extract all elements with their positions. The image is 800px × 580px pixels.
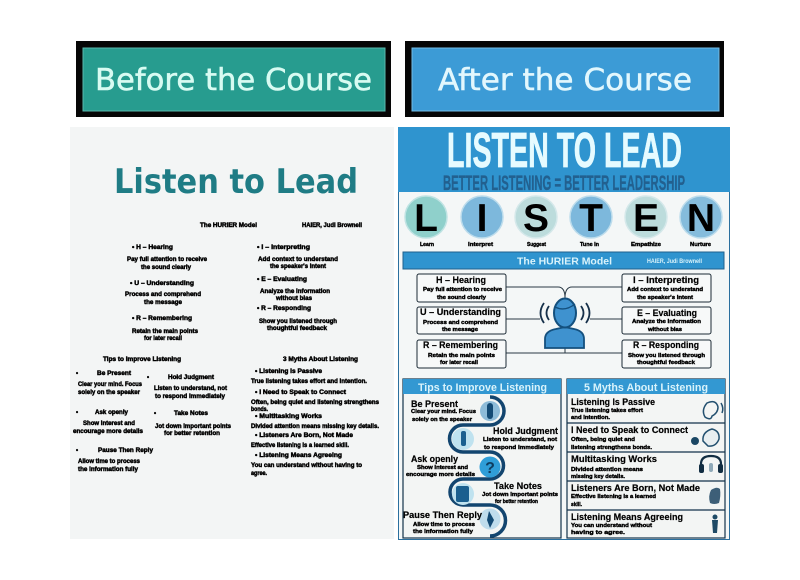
text block: plain document body: Show interest and: [83, 421, 135, 427]
text block: plain document body: Ask openly: [95, 410, 129, 416]
text block: plain document body: Clear your mind. Focus: [78, 382, 143, 388]
model box: Responding: [622, 340, 711, 368]
tip text: Take Notes: Jot down important points: [482, 492, 558, 498]
tip text: Be Present: Clear your mind. Focus: [411, 409, 476, 415]
text block: plain document body: Effective listening is a learned skill.: [251, 443, 349, 449]
text block: plain document body: for later recall: [144, 336, 182, 342]
header banner: [398, 124, 730, 195]
model box: Hearing: the sound clearly: [437, 295, 487, 301]
text block: plain document body: • Multitasking Works: [255, 414, 323, 420]
myth: Multitasking Works: missing key details.: [571, 474, 625, 480]
LISTEN letter circles: E: [633, 197, 659, 240]
text block: plain document body: • I Need to Speak to Connect: [255, 390, 346, 396]
myth: I Need to Speak to Connect: [571, 425, 688, 451]
myth: Listeners Are Born, Not Made: Effective listening is a learned: [571, 494, 656, 500]
LISTEN letter circles: I: [477, 197, 487, 240]
LISTEN letter circles: Learn: [420, 242, 435, 248]
myth: Multitasking Works: [571, 454, 657, 480]
icon: standing figure: [712, 514, 718, 533]
myth: Listening Is Passive: [571, 397, 655, 421]
icon: ear: [703, 402, 723, 419]
text block: plain document body: •: [154, 411, 156, 417]
text block: plain document body: Pay full attention to receive: [127, 257, 208, 263]
text block: plain document body: thoughtful feedback: [267, 326, 328, 332]
LISTEN letter circles: L: [414, 197, 438, 240]
tip text: Hold Judgment: Hold Judgment: [493, 426, 558, 436]
myth: I Need to Speak to Connect: Often, being quiet and: [571, 437, 635, 443]
section bar: The HURIER Model: HAIER, Judi Brownell: [647, 259, 702, 265]
myth: Listeners Are Born, Not Made: Listeners Are Born, Not Made: [571, 483, 700, 493]
panel: before course plain document: [70, 127, 394, 539]
section bar: The HURIER Model: The HURIER Model: [517, 256, 612, 268]
LISTEN letter circles: Tune In: [580, 242, 600, 248]
myth: Listening Is Passive: True listening takes effort: [571, 408, 643, 414]
text block: plain document body: Be Present: [97, 371, 131, 377]
tip text: Be Present: [411, 399, 476, 423]
text block: plain document body: •: [147, 375, 149, 381]
tip text: Take Notes: [482, 481, 558, 505]
model box: Responding: R – Responding: [633, 340, 699, 350]
tip text: Hold Judgment: Listen to understand, not: [483, 437, 557, 443]
myth: Multitasking Works: Divided attention means: [571, 467, 643, 473]
model box: Evaluating: E – Evaluating: [637, 308, 697, 318]
text block: plain document body: •: [76, 371, 78, 377]
tip text: Ask openly: [406, 454, 475, 478]
heading: Before the Course: [76, 41, 391, 117]
text block: plain document body: to respond immediately: [155, 394, 226, 400]
text block: plain document body: the information fully: [78, 467, 139, 473]
panel: Tips to Improve Listening: Tips to Improve Listening: [418, 382, 547, 394]
text block: plain document body: Retain the main points: [132, 329, 199, 335]
title: Listen to Lead: Listen to Lead: [114, 162, 358, 202]
text block: plain document body: agree.: [251, 471, 267, 477]
model box: Hearing: [417, 274, 506, 302]
tip icons: ?: [485, 460, 495, 477]
model box: Evaluating: Analyze the information: [632, 319, 702, 325]
text block: plain document body: • Listening Is Passive: [255, 369, 323, 375]
tip text: Be Present: Be Present: [411, 399, 458, 409]
text block: plain document body: Show you listened through: [259, 319, 337, 325]
text block: plain document body: Hold Judgment: [168, 375, 214, 381]
myth: Listening Is Passive: Listening Is Passive: [571, 397, 655, 407]
LISTEN letter circles: T: [579, 197, 603, 240]
tip text: Ask openly: Ask openly: [411, 454, 458, 464]
icon: headphones: [699, 456, 723, 473]
model box: Understanding: U – Understanding: [420, 307, 501, 317]
tip text: Pause Then Reply: Allow time to process: [413, 522, 475, 528]
model box: Responding: thoughtful feedback: [637, 360, 696, 366]
heading: After the Course: [405, 41, 724, 117]
model box: Understanding: [417, 307, 506, 334]
model box: Evaluating: without bias: [647, 327, 682, 333]
text block: plain document body: HAIER, Judi Brownell: [302, 223, 362, 229]
model box: Remembering: [417, 340, 506, 368]
serpentine path: [450, 397, 505, 536]
text block: plain document body: • I – Interpreting: [257, 245, 310, 251]
myth: Listeners Are Born, Not Made: [571, 483, 700, 508]
text block: plain document body: 3 Myths About Listening: [283, 357, 358, 363]
text block: plain document body: solely on the speaker: [78, 390, 141, 396]
text block: plain document body: bonds.: [251, 407, 268, 413]
text block: plain document body: • R – Remembering: [132, 316, 192, 322]
model box: Interpreting: the speaker's intent: [637, 295, 693, 301]
myth: Listening Is Passive: and intention.: [571, 415, 610, 421]
text block: plain document body: • R – Responding: [257, 306, 311, 312]
text block: plain document body: Often, being quiet and listening strengthens: [251, 400, 380, 406]
text block: plain document body: The HURIER Model: [200, 223, 257, 229]
tip text: Take Notes: for better retention: [495, 499, 539, 505]
myth: Listening Means Agreeing: Listening Means Agreeing: [571, 512, 683, 522]
model box: Hearing: Pay full attention to receive: [423, 287, 502, 293]
text block: plain document body: • E – Evaluating: [257, 277, 307, 283]
LISTEN letter circles: Empathize: [631, 242, 661, 248]
text block: plain document body: True listening takes effort and intention.: [251, 379, 367, 385]
model box: Hearing: H – Hearing: [436, 275, 486, 285]
myth: Listening Means Agreeing: having to agree.: [571, 530, 626, 536]
model box: Understanding: Process and comprehend: [423, 320, 498, 326]
text block: plain document body: Divided attention means missing key details.: [251, 424, 379, 430]
tip text: Be Present: solely on the speaker: [412, 417, 473, 423]
myth: I Need to Speak to Connect: listening strengthens bonds.: [571, 445, 653, 451]
text block: plain document body: the sound clearly: [141, 265, 192, 271]
panel: after course designed infographic: [398, 124, 730, 540]
LISTEN letter circles: Suggest: [527, 242, 546, 248]
myth: Multitasking Works: Multitasking Works: [571, 454, 657, 464]
text block: plain document body: without bias: [275, 296, 313, 302]
text block: plain document body: Add context to understand: [258, 257, 338, 263]
model box: Interpreting: [622, 274, 711, 302]
text block: plain document body: • Listening Means Agreeing: [255, 453, 342, 459]
model box: Responding: Show you listened through: [628, 353, 706, 359]
text block: plain document body: the speaker's intent: [270, 264, 326, 270]
text block: plain document body: for better retention: [164, 431, 220, 437]
myth: Listeners Are Born, Not Made: skill.: [571, 502, 582, 508]
panel: Tips to Improve Listening: [403, 379, 561, 538]
myth: Listening Means Agreeing: You can understand without: [571, 523, 652, 529]
icon: stone: [709, 488, 720, 504]
connector lines: [506, 287, 622, 353]
text block: plain document body: the message: [144, 300, 183, 306]
model box: Remembering: for later recall: [440, 360, 478, 366]
model box: Interpreting: Add context to understand: [627, 287, 703, 293]
icon: listening person with sound waves: [540, 298, 590, 348]
tip text: Pause Then Reply: [403, 510, 482, 535]
tip text: Ask openly: encourage more details: [406, 472, 475, 478]
LISTEN letter circles: Interpret: [468, 242, 493, 248]
model box: Understanding: the message: [442, 327, 478, 333]
text block: plain document body: • H – Hearing: [132, 245, 173, 251]
section bar: The HURIER Model: [403, 252, 724, 269]
tip text: Hold Judgment: to respond immediately: [484, 445, 555, 451]
text block: plain document body: •: [76, 410, 78, 416]
model box: Evaluating: [622, 307, 711, 334]
text block: plain document body: Analyze the information: [260, 289, 330, 295]
text block: plain document body: •: [76, 448, 78, 454]
tip text: Pause Then Reply: Pause Then Reply: [403, 510, 482, 520]
model box: Interpreting: I – Interpreting: [633, 275, 699, 285]
text block: plain document body: • Listeners Are Born, Not Made: [255, 433, 354, 439]
text block: plain document body: Listen to understand, not: [154, 386, 227, 392]
text block: plain document body: • U – Understanding: [130, 281, 194, 287]
tip icons: [452, 401, 500, 530]
icon: speech and head: [691, 429, 719, 446]
LISTEN letter circles: S: [523, 197, 549, 240]
heading: After the Course: After the Course: [438, 63, 692, 98]
model box: Remembering: Retain the main points: [428, 353, 495, 359]
text block: plain document body: encourage more details: [73, 429, 144, 435]
model box: Remembering: R – Remembering: [423, 340, 498, 350]
LISTEN letter circles: Nurture: [690, 242, 711, 248]
panel: 5 Myths About Listening: [567, 379, 725, 538]
tip text: Take Notes: Take Notes: [494, 481, 542, 491]
text block: plain document body: Process and comprehend: [125, 292, 201, 298]
tip text: Pause Then Reply: the information fully: [413, 529, 474, 535]
text block: plain document body: You can understand without having to: [251, 463, 362, 469]
text block: plain document body: Take Notes: [174, 411, 209, 417]
text block: plain document body: [73, 223, 380, 477]
text block: plain document body: Pause Then Reply: [98, 448, 154, 454]
text block: plain document body: Tips to Improve Listening: [103, 357, 181, 363]
tip text: Hold Judgment: [483, 426, 558, 451]
heading: Before the Course: Before the Course: [95, 63, 372, 98]
LISTEN letter circles: N: [687, 197, 715, 240]
tip text: Ask openly: Show interest and: [417, 465, 468, 471]
myth: I Need to Speak to Connect: I Need to Speak to Connect: [571, 425, 688, 435]
text block: plain document body: Allow time to process: [78, 459, 141, 465]
text block: plain document body: Jot down important points: [155, 424, 232, 430]
panel: 5 Myths About Listening: 5 Myths About Listening: [584, 382, 708, 394]
myth: Listening Means Agreeing: [571, 512, 683, 536]
LISTEN letter circles: [405, 196, 722, 248]
